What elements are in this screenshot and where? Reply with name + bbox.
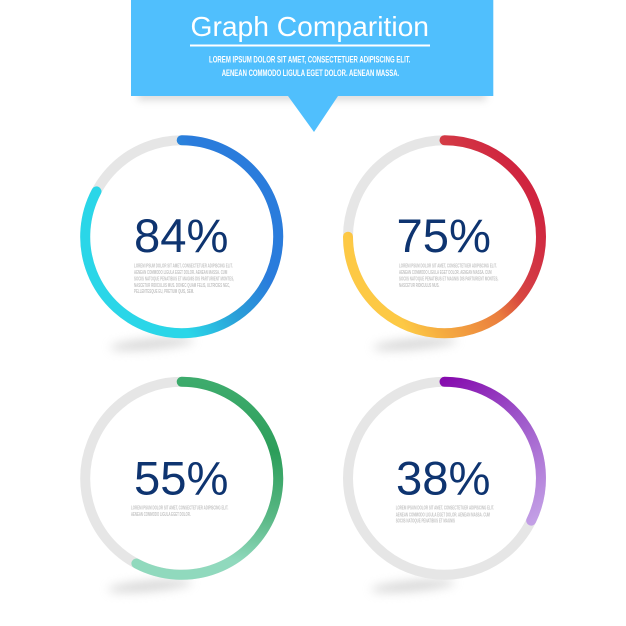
description: LOREM IPSUM DOLOR SIT AMET, CONSECTETUER ADIPISCING ELIT. <box>399 264 497 270</box>
description: NASCETUR RIDICULUS MUS. DONEC QUAM FELIS, ULTRICIES NEC, <box>134 283 230 289</box>
percentage: 75% <box>396 210 491 263</box>
percentage: 38% <box>396 452 490 505</box>
panel: 38% ring <box>348 382 541 595</box>
percentage: 55% <box>134 452 228 505</box>
ring shadow <box>373 335 457 353</box>
banner box with pointer <box>131 0 493 132</box>
description: SOCIIS NATOQUE PENATIBUS ET MAGNIS DIS PARTURIENT MONTES, <box>399 277 499 283</box>
ring progress <box>85 140 278 333</box>
header banner <box>131 0 493 132</box>
description <box>131 505 229 518</box>
description: AENEAN COMMODO LIGULA EGET DOLOR. <box>131 512 191 518</box>
panel: 75% ring <box>348 140 541 353</box>
description: LOREM IPSUM DOLOR SIT AMET, CONSECTETUER ADIPISCING ELIT. <box>396 505 494 511</box>
description: SOCIIS NATOQUE PENATIBUS ET MAGNIS DIS PARTURIENT MONTES, <box>134 277 234 283</box>
title: Graph Comparition <box>190 11 429 42</box>
percentage: 84% <box>134 210 228 263</box>
ring track <box>348 382 541 575</box>
description: AENEAN COMMODO LIGULA EGET DOLOR. AENEAN MASSA. CUM <box>396 512 490 518</box>
panel: 84% ring <box>85 140 278 353</box>
banner shadow <box>138 91 486 100</box>
description <box>399 264 499 289</box>
ring track <box>348 140 541 333</box>
ring progress <box>348 140 541 333</box>
ring progress <box>136 382 278 575</box>
ring track <box>85 382 278 575</box>
subtitle: LOREM IPSUM DOLOR SIT AMET, CONSECTETUER ADIPISCING ELIT. <box>209 55 410 66</box>
description: LOREM IPSUM DOLOR SIT AMET, CONSECTETUER ADIPISCING ELIT. <box>131 505 229 511</box>
description: AENEAN COMMODO LIGULA EGET DOLOR. AENEAN MASSA. CUM <box>399 270 492 276</box>
title underline <box>190 44 430 46</box>
description: NASCETUR RIDICULUS MUS. <box>399 283 440 289</box>
subtitle: AENEAN COMMODO LIGULA EGET DOLOR. AENEAN MASSA. <box>222 68 399 79</box>
ring shadow <box>108 577 192 595</box>
description <box>134 264 234 295</box>
description: SOCIIS NATOQUE PENATIBUS ET MAGNIS <box>396 518 455 524</box>
description: LOREM IPSUM DOLOR SIT AMET, CONSECTETUER ADIPISCING ELIT. <box>134 264 233 270</box>
ring shadow <box>110 335 194 353</box>
panel: 55% ring <box>85 382 278 595</box>
description <box>396 505 494 524</box>
ring track <box>85 140 278 333</box>
ring progress <box>444 382 541 521</box>
description: PELLENTESQUE EU, PRETIUM QUIS, SEM. <box>134 289 194 295</box>
ring shadow <box>371 577 455 595</box>
subtitle <box>209 55 410 79</box>
description: AENEAN COMMODO LIGULA EGET DOLOR. AENEAN MASSA. CUM <box>134 270 227 276</box>
